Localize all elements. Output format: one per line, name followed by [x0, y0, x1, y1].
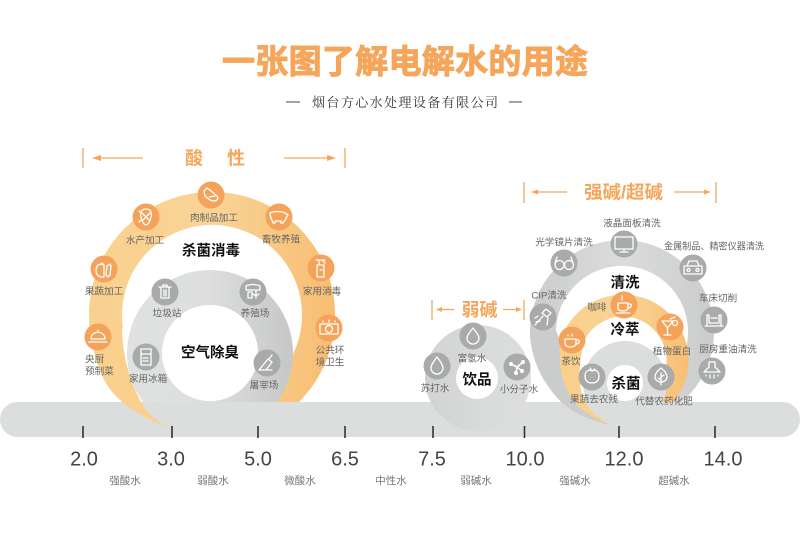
item: coffee [587, 292, 638, 318]
item: CIP cleaning: CIP清洗 [531, 290, 567, 302]
item: central kitchen prepared dishes: 央厨 [85, 354, 105, 366]
item: lathe cutting [699, 292, 737, 334]
item: kitchen grease cleaning [698, 344, 757, 384]
ring headings: 饮品 [462, 372, 492, 388]
item: metal and precision instrument cleaning [664, 240, 764, 282]
water type labels: 弱碱水 [460, 475, 492, 487]
item: LCD panel cleaning: 液晶面板清洗 [603, 218, 661, 230]
ring headings: 杀菌消毒 [182, 242, 240, 260]
water type labels: 超碱水 [658, 474, 690, 487]
item: breeding farm [240, 278, 270, 320]
item: fruit and vegetable processing: 果蔬加工 [85, 286, 124, 298]
pH ticks [83, 426, 715, 438]
item: fruit and vegetable pesticide removal [570, 364, 618, 406]
item: coffee: 咖啡 [587, 302, 607, 314]
title: 一张图了解电解水的用途 [222, 43, 588, 80]
water type labels: 微酸水 [284, 474, 316, 487]
water type labels: 强酸水 [109, 474, 141, 487]
item: plant protein: 植物蛋白 [653, 346, 691, 358]
water type labels: 强碱水 [559, 475, 591, 487]
heading: weak alkaline range [432, 300, 524, 320]
item: meat processing: 肉制品加工 [190, 212, 238, 224]
item: hydrogen-rich water [458, 322, 487, 364]
item: fruit and vegetable processing [85, 256, 124, 298]
pH values: 12.0 [605, 448, 643, 470]
item: pesticide and fertilizer replacement: 代替农药化肥 [635, 396, 693, 408]
heading: acid range [83, 148, 345, 168]
item: soda water: 苏打水 [421, 382, 450, 394]
item: small molecule water [500, 354, 539, 396]
item: aquatic processing [126, 204, 165, 246]
item: optical lens cleaning [535, 236, 593, 276]
item: slaughterhouse [250, 350, 280, 392]
item: pesticide and fertilizer replacement [635, 364, 693, 408]
item: central kitchen prepared dishes [84, 324, 114, 378]
pH values: 14.0 [704, 448, 742, 470]
item: public hygiene: 境卫生 [316, 356, 345, 368]
pH values: 7.5 [418, 448, 446, 470]
item: animal husbandry [262, 204, 301, 246]
ring centre holes [162, 305, 258, 401]
ring headings: 空气除臭 [181, 344, 239, 362]
item: fruit and vegetable pesticide removal: 果蔬去农残 [570, 394, 618, 406]
item: breeding farm: 养殖场 [241, 308, 270, 320]
ring headings [181, 242, 640, 392]
item: household refrigerator [129, 344, 168, 385]
item: household refrigerator: 家用冰箱 [129, 373, 168, 385]
ring tails over the bar [89, 318, 610, 431]
heading: strong and super alkaline range: 强碱/超碱 [584, 182, 663, 202]
water type labels: 弱酸水 [197, 474, 229, 487]
pH values [70, 448, 742, 470]
item: animal husbandry: 畜牧养殖 [262, 234, 301, 246]
item: central kitchen prepared dishes: 预制菜 [85, 366, 114, 378]
item: public hygiene [316, 314, 345, 368]
pH values: 10.0 [506, 448, 544, 470]
pH values: 2.0 [70, 448, 98, 470]
item: LCD panel cleaning [603, 218, 661, 258]
item: CIP cleaning [530, 290, 567, 330]
pH values: 3.0 [157, 448, 185, 470]
item: tea drinks: 茶饮 [561, 356, 581, 368]
item: household disinfection [303, 254, 342, 298]
water type labels [109, 474, 690, 487]
item: tea drinks [558, 326, 586, 368]
ring headings: 冷萃 [610, 320, 640, 338]
item: aquatic processing: 水产加工 [126, 234, 165, 246]
item: garbage station: 垃圾站 [153, 308, 182, 320]
item: household disinfection: 家用消毒 [303, 286, 342, 298]
item: slaughterhouse: 屠宰场 [250, 380, 279, 392]
pH scale bar [0, 402, 800, 437]
pH values: 6.5 [331, 448, 359, 470]
item: metal and precision instrument cleaning: 金属制品、精密仪器清洗 [664, 240, 764, 252]
item: optical lens cleaning: 光学镜片清洗 [535, 236, 593, 248]
item: public hygiene: 公共环 [316, 346, 345, 356]
heading: weak alkaline range: 弱碱 [462, 300, 498, 320]
item: soda water [421, 352, 450, 394]
subtitle: 烟台方心水处理设备有限公司 [312, 95, 498, 110]
item: meat processing [190, 182, 238, 224]
item: kitchen grease cleaning: 厨房重油清洗 [699, 344, 757, 356]
item: garbage station [152, 278, 182, 320]
rings behind the pH bar [106, 208, 701, 418]
item: lathe cutting: 车床切削 [699, 292, 737, 304]
water type labels: 中性水 [375, 474, 407, 487]
pH values: 5.0 [244, 448, 272, 470]
heading: strong and super alkaline range [524, 182, 716, 203]
item: hydrogen-rich water: 富氢水 [458, 352, 487, 364]
item: small molecule water: 小分子水 [500, 384, 539, 396]
ring headings: 杀菌 [612, 374, 640, 392]
ring headings: 清洗 [610, 274, 640, 292]
item: plant protein [653, 314, 691, 358]
heading: acid range: 酸性 [185, 148, 245, 168]
